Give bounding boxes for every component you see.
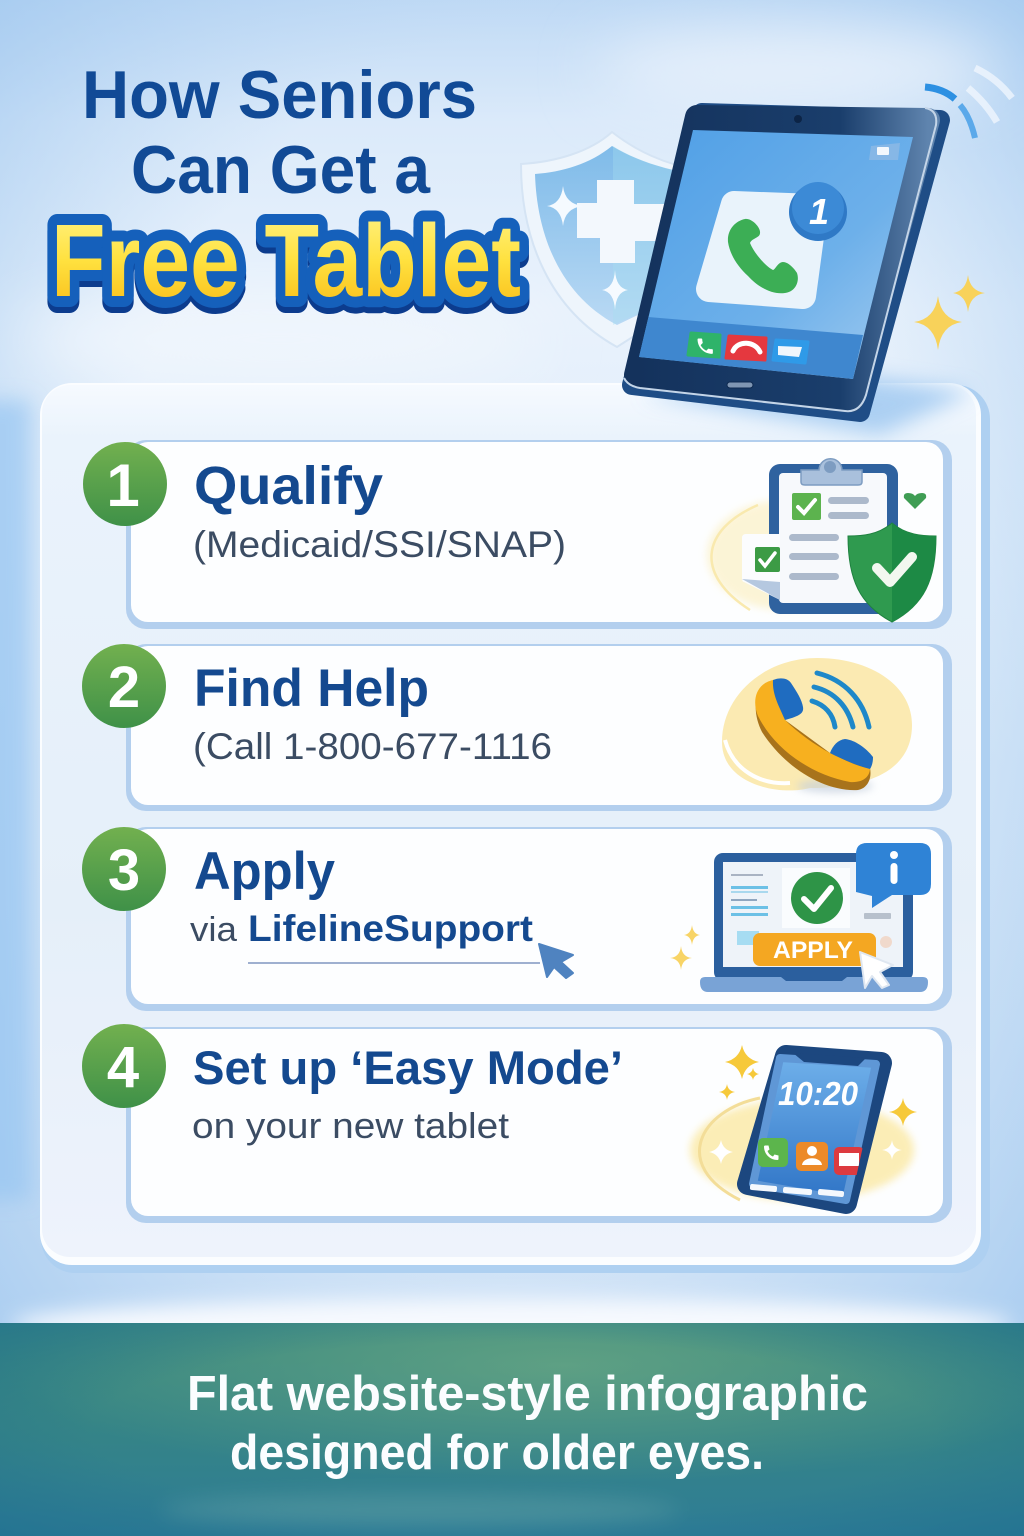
step 3 number badge: 3 bbox=[108, 838, 140, 903]
step 3 detail bbox=[190, 908, 540, 964]
step 1 detail: (Medicaid/SSI/SNAP) bbox=[193, 524, 566, 565]
step 1 number badge bbox=[83, 442, 167, 526]
card 4 bbox=[126, 1027, 952, 1223]
step 2 number badge bbox=[82, 644, 166, 728]
step 4 detail: on your new tablet bbox=[192, 1105, 509, 1146]
icon: clipboard with shield bbox=[707, 459, 936, 622]
icon: smartphone with easy mode: 10:20 bbox=[778, 1075, 859, 1112]
icon: laptop with apply button: APPLY bbox=[773, 937, 853, 964]
step 2 heading: Find Help bbox=[194, 659, 429, 718]
panel: steps container bbox=[40, 375, 990, 1273]
highlighted title words: Free Tablet bbox=[51, 203, 521, 318]
tablet screen bbox=[639, 130, 913, 379]
call buttons bbox=[688, 333, 808, 363]
step 3 detail: via bbox=[190, 911, 237, 949]
footer caption bbox=[187, 1367, 868, 1480]
home button bbox=[727, 382, 753, 388]
step 2 detail: (Call 1-800-677-1116 bbox=[193, 726, 552, 767]
step 3 detail: LifelineSupport bbox=[248, 908, 533, 949]
icon: blue cursor bbox=[539, 944, 573, 978]
step 3 heading: Apply bbox=[194, 842, 335, 901]
notification badge: 1 bbox=[809, 191, 829, 232]
phone app tile bbox=[709, 182, 847, 296]
footer caption: Flat website-style infographic bbox=[187, 1367, 868, 1421]
icon: smartphone with easy mode bbox=[690, 1045, 917, 1203]
step 3 number badge bbox=[82, 827, 166, 911]
title: How Seniors bbox=[82, 57, 477, 133]
title: Can Get a bbox=[131, 132, 431, 208]
card 2 bbox=[126, 644, 952, 811]
icon: yellow telephone handset bbox=[722, 658, 912, 793]
step 1 heading: Qualify bbox=[194, 456, 383, 516]
tablet shadow on panel bbox=[640, 375, 975, 435]
icon: tablet with call app bbox=[624, 108, 940, 412]
footer caption: designed for older eyes. bbox=[230, 1426, 764, 1480]
icon: signal arcs bbox=[925, 68, 1012, 138]
icon: gold sparkles bbox=[914, 275, 985, 350]
icon: medical shield bbox=[521, 132, 700, 347]
step 4 number badge: 4 bbox=[107, 1035, 139, 1100]
card 1 bbox=[126, 440, 952, 629]
footer band bbox=[0, 1323, 1024, 1536]
step 2 number badge: 2 bbox=[108, 655, 140, 720]
camera bbox=[794, 115, 802, 123]
step 1 number badge: 1 bbox=[106, 452, 140, 519]
step 4 heading: Set up ‘Easy Mode’ bbox=[193, 1041, 623, 1094]
tablet body bbox=[632, 113, 940, 412]
title bbox=[51, 57, 521, 318]
icon: laptop with apply button bbox=[670, 843, 931, 992]
step 4 number badge bbox=[82, 1024, 166, 1108]
card 3 bbox=[126, 827, 952, 1011]
status chip bbox=[869, 143, 900, 160]
